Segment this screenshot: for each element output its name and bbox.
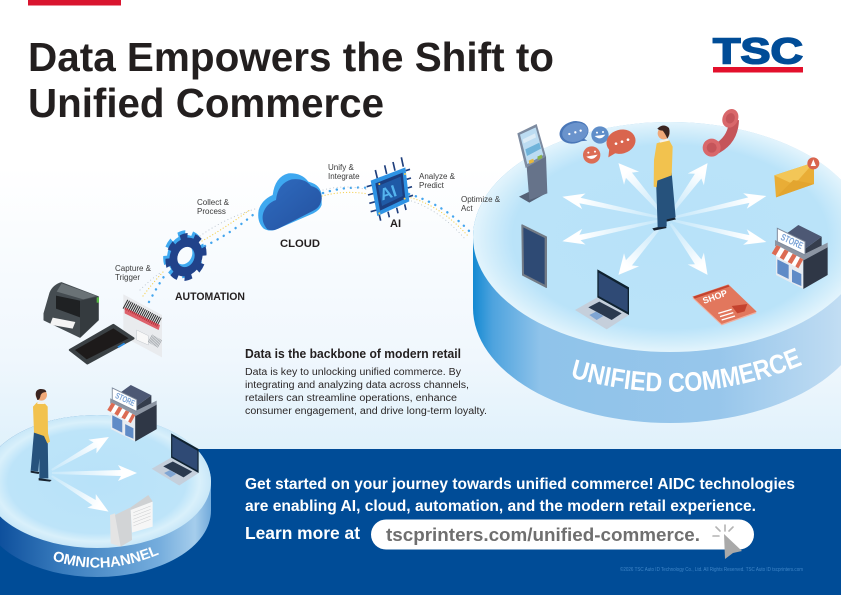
- icon: automation gear: [159, 228, 210, 283]
- arrows radiating from shopper: [561, 157, 768, 281]
- icon: click cursor: [713, 525, 742, 559]
- omnichannel icon: laptop: [152, 433, 199, 486]
- label: collect and process: Process: [197, 207, 226, 216]
- icon: storefront: STORE: [779, 232, 805, 252]
- icon: laptop: [575, 269, 629, 329]
- text block: data is the backbone: [245, 347, 487, 417]
- call to action text: [245, 476, 795, 543]
- stage headings: AI: [390, 218, 401, 230]
- label: omnichannel: OMNICHANNEL: [54, 547, 159, 568]
- icon: kiosk: [517, 124, 547, 203]
- icon: telephone: [703, 106, 741, 157]
- stage headings: [175, 218, 401, 303]
- bottom blue band: [0, 449, 841, 595]
- label: optimize and act: Act: [461, 204, 473, 213]
- blue bubble: [557, 118, 591, 147]
- red smiley: [583, 146, 600, 164]
- omnichannel icon: catalog book: [110, 495, 153, 547]
- URL pill: [371, 520, 754, 550]
- text block: data is the backbone: Data is key to unlocking unified commerce. By: [245, 367, 461, 378]
- icon: shop catalog: SHOP: [701, 288, 729, 306]
- icon: cloud: [258, 173, 322, 231]
- platform: omnichannel disc: [0, 415, 211, 577]
- call to action text: are enabling AI, cloud, automation, and the modern retail experience.: [245, 498, 756, 515]
- label: unify and integrate: Integrate: [328, 172, 360, 181]
- omnichannel icon: store: STORE: [114, 390, 137, 408]
- omnichannel icon: store: [107, 385, 157, 441]
- text block: data is the backbone: retailers can streamline operations, enhance: [245, 393, 457, 404]
- copyright line: ©2026 TSC Auto ID Technology Co., Ltd. All Rights Reserved. TSC Auto ID tscprinters.com: [620, 566, 803, 573]
- icon: barcode label with scan: [123, 294, 162, 357]
- top red accent bar: [28, 0, 121, 6]
- label: unify and integrate: Unify &: [328, 163, 354, 172]
- shopper figure: [652, 125, 676, 231]
- stage labels: [115, 163, 501, 282]
- omnichannel shopper figure: [31, 389, 52, 482]
- label: unified commerce: UNIFIED COMMERCE: [572, 348, 802, 392]
- red bubble: [604, 126, 638, 157]
- icon: mobile computer: [70, 325, 133, 363]
- label: capture and trigger: Trigger: [115, 273, 140, 282]
- TSC logo: TSC: [713, 30, 803, 72]
- icon: AI chip: [367, 157, 413, 221]
- blue smiley: [591, 126, 609, 144]
- stage headings: CLOUD: [280, 238, 320, 250]
- icon: AI chip: AI: [377, 181, 399, 204]
- title: Unified Commerce: [28, 80, 384, 126]
- label: collect and process: Collect &: [197, 198, 229, 207]
- call to action text: Get started on your journey towards unified commerce! AIDC technologies: [245, 476, 795, 493]
- text block: data is the backbone: integrating and analyzing data across channels,: [245, 380, 469, 391]
- title: Data Empowers the Shift to: [28, 34, 554, 80]
- icon: email envelope: [774, 157, 819, 197]
- omnichannel arrows: [47, 430, 137, 518]
- text block: data is the backbone: consumer engagement, and drive long-term loyalty.: [245, 406, 487, 417]
- label: capture and trigger: Capture &: [115, 264, 151, 273]
- label: analyze and predict: Analyze &: [419, 172, 455, 181]
- text block: data is the backbone: Data is the backbone of modern retail: [245, 347, 461, 361]
- platform: unified commerce disc: [473, 122, 841, 423]
- URL pill: tscprinters.com/unified-commerce.: [386, 524, 700, 545]
- title: [28, 34, 554, 126]
- icon: chat bubbles: [557, 118, 638, 164]
- label: analyze and predict: Predict: [419, 181, 445, 190]
- icon: shop catalog: [692, 284, 757, 325]
- icon: tablet: [522, 225, 546, 287]
- label: optimize and act: Optimize &: [461, 195, 500, 204]
- call to action text: Learn more at: [245, 523, 360, 543]
- icon: storefront: [772, 225, 828, 289]
- stage headings: AUTOMATION: [175, 291, 245, 303]
- icon: printer: [44, 283, 99, 337]
- data flow dotted connectors: [140, 187, 470, 302]
